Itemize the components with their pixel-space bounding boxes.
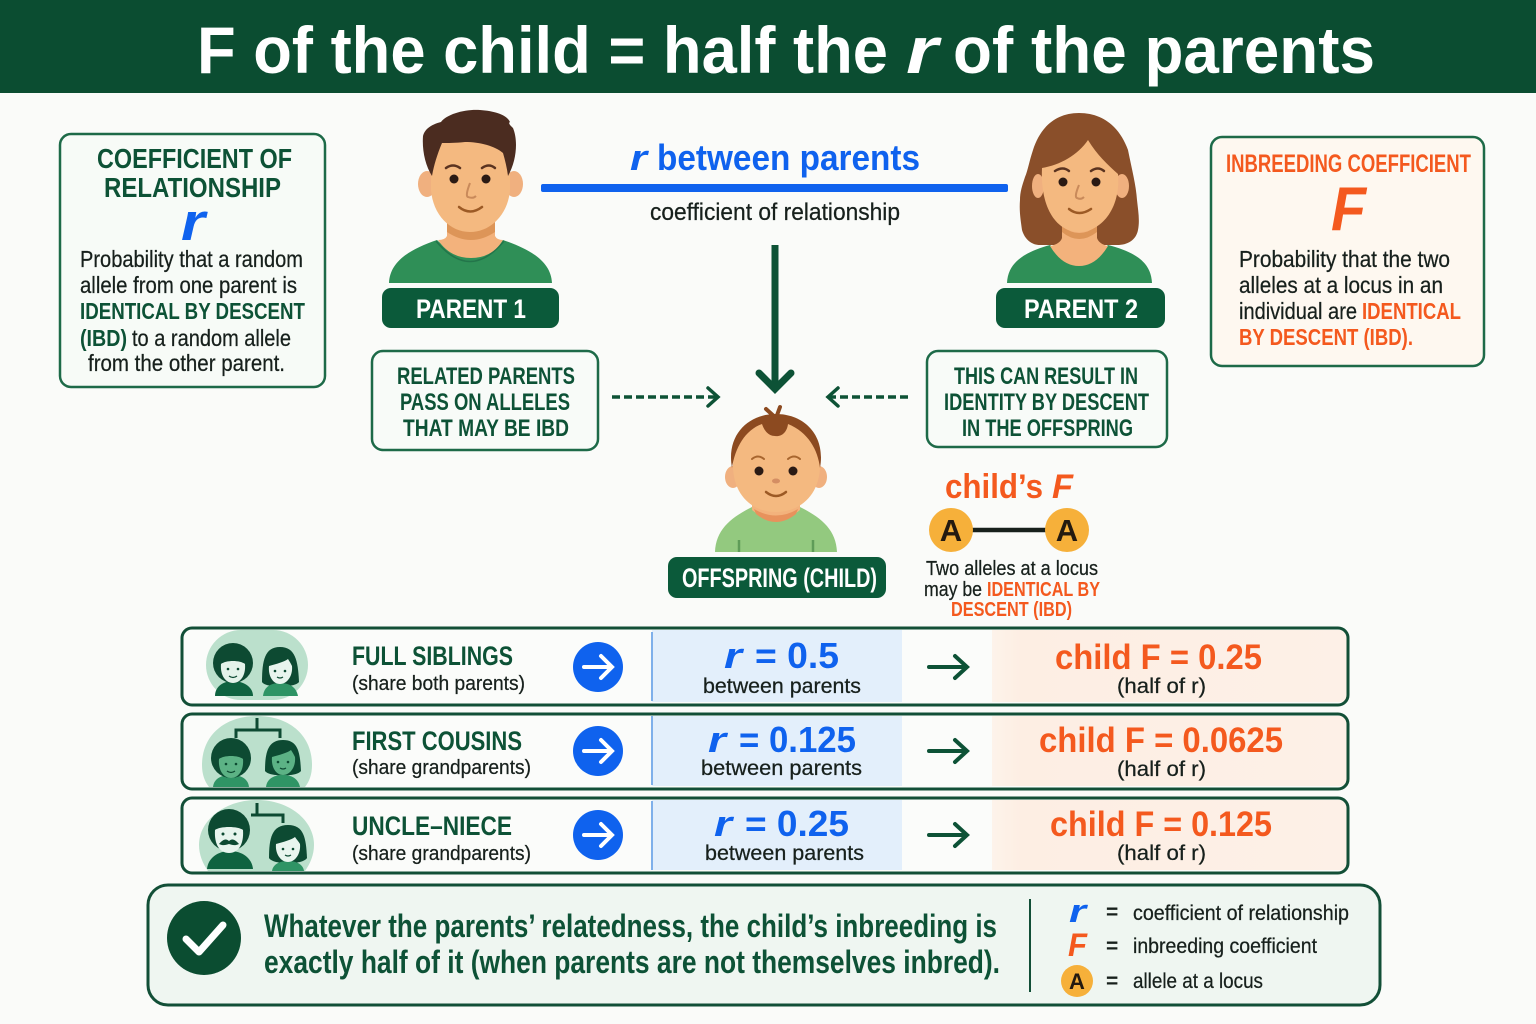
label: parent 1: PARENT 1 (416, 294, 526, 324)
legend: r (1069, 893, 1088, 929)
relationship bar: r between parents: coefficient of relationship (650, 199, 900, 226)
panel: inbreeding coefficient: F (1331, 175, 1368, 244)
callout: identity by descent: THIS CAN RESULT IN (954, 363, 1138, 390)
label: offspring: OFFSPRING (CHILD) (682, 563, 877, 593)
relationship bar: r between parents: between parents (657, 137, 920, 178)
title banner: of the parents (953, 13, 1375, 87)
icon: two linked alleles (929, 508, 1089, 552)
label: offspring (668, 557, 886, 598)
row: first cousins: child F = 0.0625 (1039, 721, 1283, 760)
title banner (0, 0, 1536, 93)
icon: blue arrow (573, 726, 623, 776)
panel: conclusion and legend (148, 885, 1380, 1005)
icon: siblings (206, 630, 308, 700)
child's F heading: child’s (945, 468, 1043, 506)
figure: parent 1 (389, 110, 552, 283)
conclusion text: exactly half of it (when parents are not themselves inbred). (264, 944, 1000, 980)
panel: coefficient of relationship: r (181, 193, 209, 252)
icon: two linked alleles: A (940, 513, 962, 548)
row: uncle-niece: child F = 0.125 (1050, 805, 1272, 844)
row: first cousins: (half of r) (1117, 758, 1206, 781)
legend (1061, 893, 1349, 997)
row: uncle-niece: (half of r) (1117, 842, 1206, 865)
arrow: dashed right (612, 388, 718, 406)
title banner: F of the child = half the (197, 13, 888, 87)
callout: identity by descent: IDENTITY BY DESCENT (944, 389, 1149, 416)
row: full siblings: between parents (703, 675, 861, 698)
icon: blue arrow (573, 810, 623, 860)
panel: coefficient of relationship: from the other parent. (88, 350, 285, 376)
panel: coefficient of relationship: to a random allele (132, 325, 291, 351)
row: full siblings: r (724, 635, 745, 676)
child's F heading: F (1052, 468, 1074, 506)
legend: = (1106, 970, 1118, 993)
text: allele explanation: may be (924, 579, 982, 601)
icon: two linked alleles: A (1056, 513, 1078, 548)
callout: related parents: RELATED PARENTS (397, 363, 575, 390)
callout: related parents: THAT MAY BE IBD (403, 415, 569, 442)
legend: = (1106, 935, 1118, 958)
row: uncle-niece: between parents (705, 842, 864, 865)
row: full siblings: = 0.5 (755, 635, 839, 676)
arrow (929, 740, 967, 762)
text: allele explanation (924, 558, 1101, 621)
panel: coefficient of relationship (60, 134, 325, 387)
callout: identity by descent (927, 351, 1167, 447)
panel: inbreeding coefficient: BY DESCENT (IBD). (1239, 324, 1413, 350)
row: first cousins: between parents (701, 757, 862, 780)
row: first cousins: = 0.125 (739, 719, 856, 760)
arrow (929, 656, 967, 678)
row: uncle-niece: r (714, 803, 735, 844)
legend: A (1069, 969, 1085, 994)
panel: inbreeding coefficient: Probability that the two (1239, 246, 1450, 272)
text: allele explanation: DESCENT (IBD) (951, 599, 1072, 621)
panel: inbreeding coefficient (1211, 137, 1484, 366)
callout: related parents (372, 351, 598, 450)
panel: coefficient of relationship: allele from one parent is (80, 272, 297, 298)
icon: check mark (167, 901, 241, 975)
label: parent 2: PARENT 2 (1024, 294, 1138, 324)
row: uncle-niece: = 0.25 (745, 803, 849, 844)
conclusion text: Whatever the parents’ relatedness, the child’s inbreeding is (264, 908, 997, 944)
row: uncle-niece: UNCLE–NIECE (352, 811, 512, 841)
legend: coefficient of relationship (1133, 902, 1349, 925)
conclusion text (264, 908, 1000, 980)
text: allele explanation: IDENTICAL BY (987, 579, 1101, 601)
text: allele explanation: Two alleles at a locus (926, 558, 1098, 580)
row: full siblings: child F = 0.25 (1055, 638, 1262, 677)
row: uncle-niece: (share grandparents) (352, 843, 531, 865)
callout: identity by descent: IN THE OFFSPRING (962, 415, 1133, 442)
arrow: dashed left (828, 388, 908, 406)
row: uncle-niece (182, 798, 1348, 873)
panel: inbreeding coefficient: individual are (1239, 298, 1357, 324)
legend: allele at a locus (1133, 970, 1263, 993)
panel: coefficient of relationship: RELATIONSHIP (104, 172, 281, 203)
icon: cousins (202, 716, 312, 787)
icon: blue arrow (573, 642, 623, 692)
arrow (929, 824, 967, 846)
relationship bar: r between parents (541, 137, 1008, 226)
callout: related parents: PASS ON ALLELES (400, 389, 570, 416)
panel: inbreeding coefficient: IDENTICAL (1362, 298, 1461, 324)
row: full siblings: FULL SIBLINGS (352, 641, 513, 671)
row: first cousins: r (708, 719, 729, 760)
row: first cousins: FIRST COUSINS (352, 726, 522, 756)
panel: coefficient of relationship: (IBD) (80, 325, 127, 351)
row: first cousins: (share grandparents) (352, 757, 531, 779)
panel: coefficient of relationship: COEFFICIENT OF (97, 143, 292, 174)
figure: child (715, 407, 837, 552)
row: full siblings: (half of r) (1117, 675, 1206, 698)
figure: parent 2 (1007, 113, 1152, 283)
icon: uncle and niece (199, 800, 314, 871)
label: parent 1 (382, 288, 559, 328)
legend: F (1068, 927, 1088, 963)
panel: inbreeding coefficient: alleles at a locus in an (1239, 272, 1443, 298)
arrow: parents down to child (759, 245, 791, 389)
panel: coefficient of relationship: IDENTICAL BY DESCENT (80, 298, 305, 324)
row: full siblings: (share both parents) (352, 673, 525, 695)
row: full siblings (182, 628, 1348, 705)
title banner: r (906, 13, 942, 87)
legend: = (1106, 901, 1118, 924)
row: first cousins (182, 714, 1348, 789)
label: parent 2 (996, 288, 1165, 328)
panel: coefficient of relationship: Probability that a random (80, 246, 303, 272)
legend: inbreeding coefficient (1133, 935, 1317, 958)
relationship bar: r between parents: r (630, 137, 649, 178)
